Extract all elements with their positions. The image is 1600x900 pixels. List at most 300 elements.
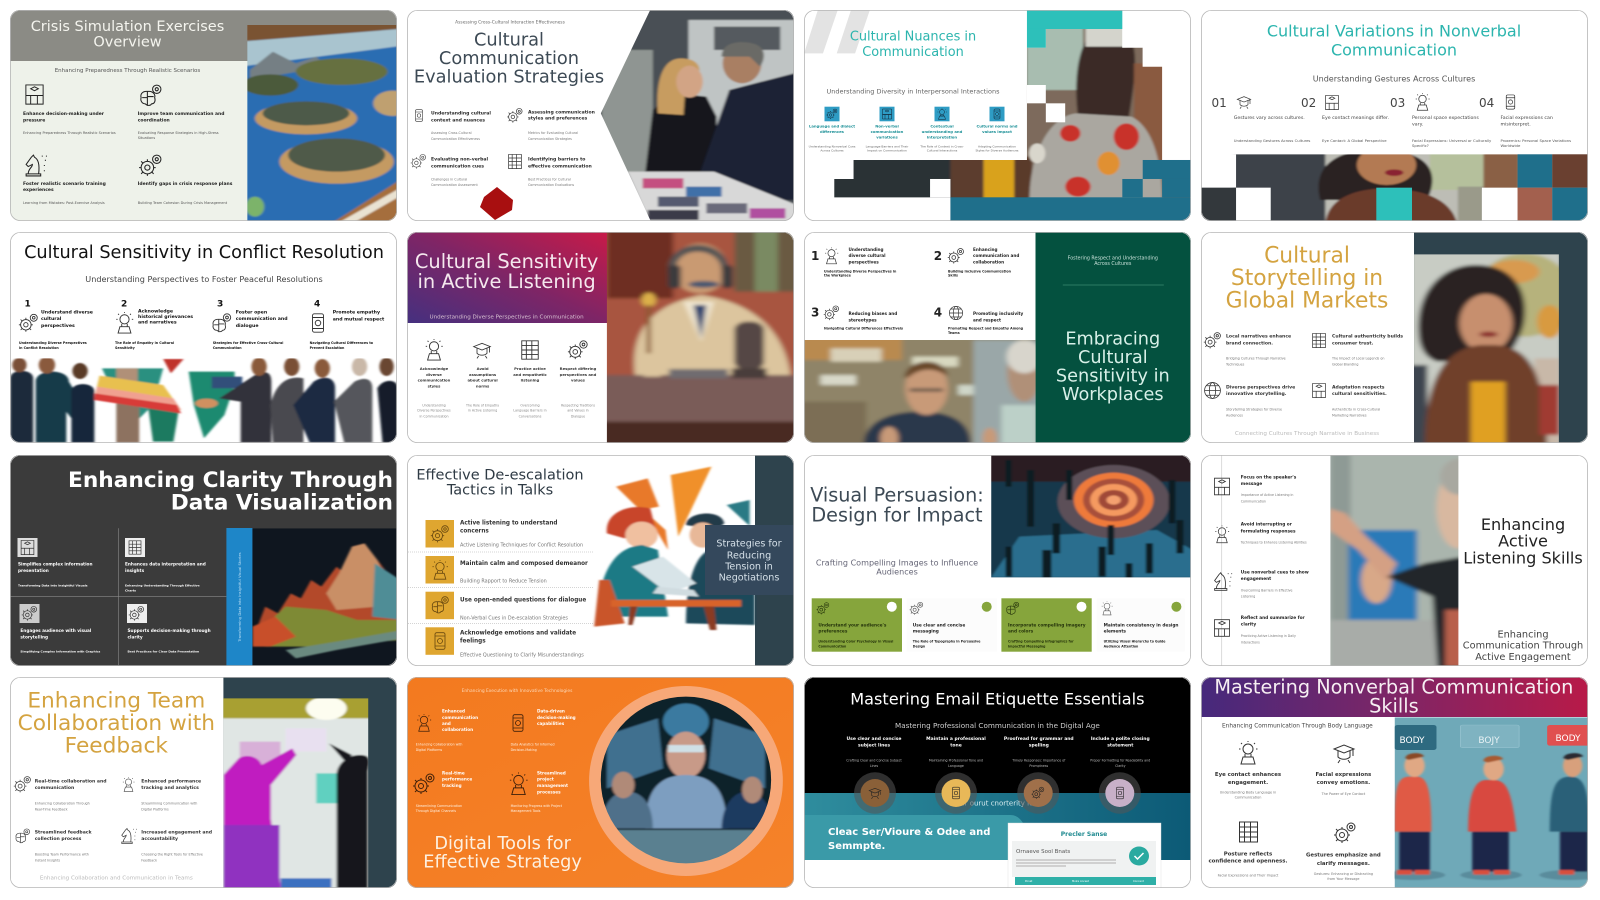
row 1	[426, 520, 583, 548]
item 2	[1313, 333, 1403, 367]
title: Communication	[1331, 40, 1457, 59]
item 3: Storytelling Strategies for Diverse	[1226, 407, 1282, 411]
item 3	[513, 341, 547, 418]
item 4: Gestures emphasize and	[1306, 853, 1381, 859]
item 1: Across Cultures	[820, 148, 844, 152]
item 4: Respecting Traditions	[561, 403, 595, 407]
item 03: 03	[1390, 96, 1405, 110]
title: Listening Skills	[1463, 548, 1583, 567]
item 3: performance	[442, 777, 472, 782]
item 4: Dialogue	[571, 414, 585, 418]
item 01	[1212, 96, 1310, 143]
item 2: Sensitivity	[115, 346, 136, 350]
item 3	[811, 306, 904, 331]
item 3: engagement	[1241, 576, 1271, 582]
item 2: Improve team communication and	[138, 111, 224, 117]
panel: Enhancing Clarity Through Data Visualization	[10, 455, 403, 668]
row 4: Effective Questioning to Clarify Misunderstandings	[460, 652, 584, 658]
item 3: communication cues	[431, 164, 484, 170]
item 3: Cultural Interactions	[927, 148, 958, 152]
item 1: 1	[24, 300, 31, 310]
item 03: Personal space expectations	[1412, 115, 1479, 121]
item 1: perspectives	[848, 260, 879, 265]
item 1: Techniques	[1225, 363, 1245, 367]
item 4: values impact	[982, 129, 1012, 134]
side subtitle: Across Cultures	[1094, 261, 1132, 267]
dark side panel	[1414, 232, 1588, 443]
item 2: Maintaining Professional Tone and	[929, 759, 983, 763]
panel: Cultural Sensitivity in Conflict Resolution	[10, 232, 398, 443]
white form card: Precler Sanse	[1061, 831, 1107, 838]
title: Cultural	[1264, 243, 1350, 268]
item 4: and mutual respect	[333, 316, 385, 322]
subtitle: Enhancing Preparedness Through Realistic Scenarios	[55, 68, 200, 74]
item 03: Facial Expressions: Universal or Culturally	[1412, 138, 1492, 143]
item 1: Lines	[870, 764, 878, 768]
teal band	[804, 793, 1191, 860]
item 3: Reducing biases and	[848, 311, 897, 316]
item 3: Communication Assessment	[431, 183, 479, 187]
item 4	[138, 155, 233, 205]
image: colleagues reviewing color swatches	[600, 10, 794, 221]
title: Enhancing Clarity Through	[68, 468, 393, 493]
item 3: Language Barriers in	[513, 409, 547, 413]
item 1: communication	[418, 378, 451, 383]
item 1: context and nuances	[431, 118, 485, 124]
item 1	[1214, 474, 1297, 503]
item 4: clarity	[128, 634, 143, 640]
title: Active	[1498, 532, 1548, 551]
item 4	[1090, 736, 1150, 814]
item 1: Enhancing Collaboration Through	[35, 802, 90, 806]
speech bubble labels: BODY	[1555, 734, 1581, 744]
item 4: management	[537, 783, 568, 788]
item 1	[809, 107, 856, 152]
subtitle: Communication Through	[1463, 640, 1583, 652]
item 4: perspectives and	[560, 372, 597, 377]
item 2: The Role of Empathy in Cultural	[115, 341, 174, 345]
item 3: interpretation	[927, 134, 957, 139]
row 1: Active Listening Techniques for Conflict Resolution	[460, 542, 583, 548]
callout: strategies for reducing tension	[705, 525, 795, 595]
item 4: from Your Message	[1327, 877, 1359, 881]
item 4: Identify gaps in crisis response plans	[138, 181, 233, 187]
image: silhouettes at a whiteboard	[219, 695, 372, 892]
image: woman in futuristic helmet at control table	[597, 695, 775, 867]
title: Cultural	[1078, 348, 1148, 368]
item 1: brand connection.	[1226, 340, 1273, 346]
item 1: Enhanced	[442, 709, 465, 714]
image: mosaic photo of woman in patterned shirt	[820, 7, 1198, 227]
item 3: Streamlining Communication	[416, 804, 462, 808]
item 4: and respect	[973, 318, 1001, 323]
item 1: Bridging Cultures Through Narrative	[1226, 357, 1286, 361]
card 2	[907, 598, 997, 652]
title: Collaboration with	[18, 711, 215, 736]
item 2: 2	[121, 300, 127, 310]
item 4: Cultural norms and	[976, 124, 1018, 129]
item 1	[18, 538, 92, 588]
red hexagon accent	[480, 187, 513, 220]
item 3: Learning from Mistakes: Post-Exercise Analysis	[23, 201, 105, 205]
item 1	[417, 339, 451, 418]
black header area	[804, 677, 1191, 793]
title: Evaluation Strategies	[414, 67, 604, 88]
light teal banner	[804, 815, 1027, 860]
item 2: and narratives	[138, 320, 177, 326]
item 04: Worldwide	[1500, 143, 1521, 148]
row 3: Non-Verbal Cues in De-escalation Strategies	[460, 615, 568, 621]
item 4: Management Tools	[511, 809, 541, 813]
item 1: in Conflict Resolution	[19, 346, 59, 350]
card 2: messaging	[913, 629, 939, 635]
card 1: Communication	[818, 644, 847, 648]
item 4: processes	[537, 789, 561, 794]
item 02: Eye Contact: A Global Perspective	[1322, 138, 1387, 143]
title: Communication	[439, 48, 579, 69]
item 3: Listening	[1241, 594, 1255, 598]
item 3: experiences	[23, 187, 54, 193]
item 3	[16, 829, 93, 863]
item 1: in Communication	[419, 414, 449, 418]
dark side panel	[223, 677, 397, 888]
subtitle: Audiences	[876, 568, 918, 577]
item 2: Global Branding	[1332, 363, 1358, 367]
item 3: Diverse perspectives drive	[1226, 384, 1295, 390]
card 1: preferences	[818, 629, 848, 635]
item 2: Enhanced performance	[141, 778, 201, 784]
item 4: Gestures: Enhancing or Distracting	[1314, 872, 1373, 876]
item 1: Transforming Data into Insightful Visuals	[18, 584, 88, 588]
item 1: Enhancing Collaboration with	[416, 743, 462, 747]
item 2: Techniques to Enhance Listening Abilities	[1240, 540, 1307, 544]
title: Tactics in Talks	[446, 482, 553, 498]
item 2: Decision-Making	[511, 748, 537, 752]
item 3: Communication	[213, 346, 242, 350]
title: Cultural Nuances in	[850, 30, 976, 45]
item 3: Evaluating non-verbal	[431, 157, 488, 163]
item 3: Overcoming Barriers in Effective	[1241, 588, 1293, 592]
item 1: Acknowledge	[420, 366, 449, 371]
item 3	[1208, 822, 1288, 877]
item 1: and	[442, 721, 451, 726]
item 1: Local narratives enhance	[1226, 334, 1291, 340]
title: Data Visualization	[171, 490, 393, 516]
card 4: Maintain consistency in design	[1104, 623, 1178, 629]
item 1: Communication Effectiveness	[431, 137, 480, 141]
item 1: styles	[428, 383, 441, 388]
item 1: communication	[35, 785, 74, 791]
item 3: spelling	[1029, 743, 1049, 749]
item 3: listening	[521, 378, 540, 383]
item 2	[138, 85, 224, 140]
item 1	[416, 110, 491, 141]
panel: Cultural Nuances in Communication	[804, 7, 1198, 227]
row 3	[426, 592, 586, 621]
card 4: Audience Attention	[1104, 644, 1139, 648]
card 1: Understand your audience's	[818, 623, 887, 629]
item 3: Promptness	[1029, 764, 1049, 768]
item 1: Communication	[1235, 795, 1261, 799]
item 04: Proxemics: Personal Space Variations	[1500, 138, 1571, 143]
item 3: Streamlined feedback	[35, 829, 93, 835]
row 1: Active listening to understand	[460, 520, 557, 526]
item 2	[115, 300, 193, 350]
subtitle: Understanding Perspectives to Foster Peaceful Resolutions	[85, 274, 323, 284]
item 1: diverse	[426, 372, 442, 377]
panel: Cultural Storytelling in Global Markets	[1201, 232, 1588, 445]
title: in Active Listening	[418, 270, 596, 293]
item 2: 2	[934, 249, 942, 263]
image: crowd around glowing target	[986, 452, 1198, 580]
item 1: engagement.	[1228, 780, 1268, 786]
item 04: 04	[1479, 96, 1494, 110]
item 3: 3	[217, 300, 223, 310]
item 1	[846, 736, 902, 814]
item 1: Assessing Cross-Cultural	[431, 131, 472, 135]
item 3: dialogue	[236, 323, 259, 329]
item 4: Clarity	[1115, 764, 1126, 768]
card 4	[1097, 598, 1185, 652]
panel: Visual Persuasion: Design for Impact	[804, 452, 1198, 666]
panel: Enhancing Active Listening Skills	[1201, 452, 1588, 668]
item 4: Styles for Diverse Audiences	[976, 148, 1019, 152]
title: Feedback	[65, 733, 168, 758]
item 4	[509, 154, 592, 187]
title: Workplaces	[1062, 385, 1164, 405]
item 4: Streamlined	[537, 770, 566, 775]
title: Storytelling in	[1231, 266, 1383, 291]
item 02	[1301, 95, 1389, 143]
item 3	[23, 155, 106, 205]
garbled band text: dr ourut cnorterity ie..	[960, 800, 1038, 808]
image: mosaic photo of smiling woman	[1201, 154, 1588, 221]
item 2: in Active Listening	[468, 409, 497, 413]
panel: Digital Tools for Effective Strategy	[407, 677, 794, 888]
item 2: communication and	[973, 253, 1019, 258]
item 4: Marketing Narratives	[1332, 414, 1367, 418]
panel: Crisis Simulation Exercises Overview	[10, 10, 412, 227]
subtitle: Crafting Compelling Images to Influence	[816, 558, 978, 567]
item 01: 01	[1212, 96, 1227, 110]
item 2: The Impact of Local Legends on	[1331, 357, 1384, 361]
item 3: Use nonverbal cues to show	[1241, 569, 1309, 575]
item 4: Promote empathy	[333, 309, 380, 315]
vertical strip text: Transforming Data into Insightful Visual Stories	[237, 552, 242, 643]
subtitle: Enhancing	[1497, 629, 1549, 640]
title: Mastering Email Etiquette Essentials	[850, 690, 1144, 708]
item 3: Foster open	[236, 309, 267, 315]
item 4	[1214, 615, 1306, 644]
timeline line	[1221, 455, 1223, 666]
item 4: Interactions	[1241, 640, 1260, 644]
item 3: understanding and	[922, 129, 963, 134]
item 4: Authenticity in Cross-Cultural	[1332, 407, 1380, 411]
item 2: styles and preferences	[528, 116, 587, 122]
item 1	[416, 709, 478, 752]
white form card: Ornaeve Sool Bnats	[1016, 849, 1070, 855]
banner headline: Cleac Ser/Vioure & Odee and	[828, 827, 990, 838]
title: Overview	[93, 34, 162, 50]
item 2: capabilities	[537, 721, 565, 726]
item 1: Understanding Body Language in	[1220, 791, 1276, 795]
row 2: Building Rapport to Reduce Tension	[460, 579, 547, 585]
title: Communication	[862, 45, 964, 60]
item 4	[976, 107, 1019, 152]
title: Design for Impact	[811, 504, 983, 527]
item 3: innovative storytelling.	[1226, 391, 1287, 397]
panel: Effective De-escalation Tactics in Talks	[407, 455, 795, 666]
item 2: Data-driven	[537, 709, 565, 714]
item 4	[934, 306, 1024, 335]
item 4: Best Practices for Clear Data Presentation	[128, 650, 199, 654]
item 1: Understanding	[848, 247, 884, 252]
item 4: Prevent Escalation	[310, 346, 345, 350]
item 2: historical grievances	[138, 314, 193, 320]
white form card: Ponet	[1025, 879, 1032, 883]
item 02: 02	[1301, 96, 1316, 110]
top label: Assessing Cross-Cultural Interaction Effectiveness	[455, 20, 566, 26]
subtitle: Enhancing Communication Through Body Language	[1222, 724, 1373, 730]
title: Mastering Nonverbal Communication	[1214, 675, 1573, 698]
title: Visual Persuasion:	[810, 484, 984, 507]
item 4: Feedback	[141, 859, 157, 863]
item 2: Digital Platforms	[141, 808, 169, 812]
panel: Mastering Nonverbal Communication Skills	[1201, 675, 1600, 889]
item 2: Cultural authenticity builds	[1332, 334, 1403, 340]
item 04	[1479, 95, 1571, 148]
item 4: Practicing Active Listening in Daily	[1241, 634, 1296, 638]
image: woman speaking before a globe	[1409, 252, 1573, 445]
callout: strategies for reducing tension: Negotiations	[719, 573, 779, 584]
title: Global Markets	[1226, 288, 1388, 313]
item 3: Engages audience with visual	[20, 628, 92, 634]
item 2: Data Analytics for Informed	[511, 743, 554, 747]
item 3	[213, 300, 288, 350]
item 4: values	[571, 378, 586, 383]
item 2: norms	[476, 383, 490, 388]
panel: Embracing Cultural Sensitivity in Workplaces	[800, 232, 1192, 450]
item 2: tone	[950, 743, 962, 749]
white form card: Concent	[1133, 879, 1144, 883]
footer line: Enhancing Collaboration and Communication in Teams	[40, 876, 193, 882]
item 2: collaboration	[973, 260, 1004, 265]
item 1: Digital Platforms	[416, 748, 442, 752]
image: two men in discussion	[800, 337, 1042, 450]
subtitle: Understanding Diversity in Interpersonal Interactions	[827, 87, 1000, 95]
item 4: Identifying barriers to	[528, 157, 585, 163]
blue vertical strip	[226, 528, 252, 668]
callout: strategies for reducing tension: Tension in	[724, 561, 773, 572]
item 1: message	[1241, 482, 1262, 487]
item 03: Specific?	[1412, 143, 1429, 148]
item 2: Enhancing Understanding Through Effective	[125, 584, 200, 588]
item 1: pressure	[23, 118, 45, 124]
callout: strategies for reducing tension: Reducing	[727, 550, 771, 561]
item 01: Understanding Gestures Across Cultures	[1234, 138, 1310, 143]
item 2: Streamlining Communication with	[141, 802, 197, 806]
item 3: Challenges in Cultural	[431, 177, 467, 181]
title: Cultural Variations in Nonverbal	[1267, 22, 1521, 41]
item 3: Through Digital Channels	[415, 809, 456, 813]
grid lines	[10, 528, 226, 665]
item 4: Best Practices for Cultural	[528, 177, 571, 181]
item 3: Boosting Team Performance with	[35, 852, 89, 856]
item 2	[125, 538, 206, 593]
item 1: Use clear and concise	[847, 736, 901, 742]
item 2: assumptions	[469, 372, 497, 377]
item 4: 4	[314, 300, 320, 310]
item 3: communication and	[236, 316, 288, 322]
title: Embracing	[1065, 329, 1160, 349]
item 2: Building Inclusive Communication	[948, 269, 1012, 273]
card 1: Understanding Color Psychology in Visual	[818, 640, 893, 644]
speech bubble labels	[1399, 734, 1581, 746]
card 2: The Role of Typography in Persuasive	[913, 640, 980, 644]
item 4: accountability	[141, 836, 178, 842]
item 2: Assessing communication	[528, 109, 595, 115]
illustration: three men with speech bubbles	[1384, 717, 1600, 889]
item 3: Facial Expressions and Their Impact	[1218, 873, 1279, 877]
item 3: Audiences	[1226, 414, 1243, 418]
item 2: The Role of Empathy	[465, 403, 499, 407]
item 1: Real-time collaboration and	[35, 778, 107, 784]
item 1	[1215, 741, 1281, 799]
item 2: Language Barriers and Their	[866, 144, 909, 148]
panel: Cultural Sensitivity in Active Listening	[407, 228, 801, 448]
item 4: Building Team Cohesion During Crisis Management	[138, 201, 228, 205]
item 2: Avoid	[477, 366, 489, 371]
item 2: Language	[948, 764, 964, 768]
divider	[1063, 284, 1164, 286]
item 4: effective communication	[528, 164, 592, 170]
card 3: Impactful Messaging	[1008, 644, 1046, 648]
item 3	[919, 107, 964, 152]
item 4: and Values in	[567, 409, 589, 413]
item 4	[310, 300, 385, 350]
item 2: coordination	[138, 118, 170, 124]
item 1	[1204, 333, 1291, 367]
item 2: Facial expressions	[1316, 772, 1371, 778]
item 1: perspectives	[41, 323, 75, 329]
item 4	[1313, 383, 1387, 418]
item 04: misinterpret.	[1500, 122, 1531, 128]
title: Effective Strategy	[423, 853, 582, 873]
title: Crisis Simulation Exercises	[31, 19, 224, 35]
subtitle: Understanding Diverse Perspectives in Communication	[430, 315, 584, 321]
item 4: Choosing the Right Tools for Effective	[141, 852, 203, 856]
card 3: and colors	[1008, 629, 1034, 635]
item 1: Real-Time Feedback	[35, 808, 68, 812]
item 1: Language and dialect	[809, 124, 855, 129]
item 2: Evaluating Response Strategies in High-Stress	[138, 131, 219, 135]
item 2: The Power of Eye Contact	[1321, 792, 1366, 796]
title: Cultural Sensitivity in Conflict Resolution	[24, 243, 384, 263]
item 1: Communication	[1241, 499, 1266, 503]
callout: strategies for reducing tension: Strategies for	[716, 539, 782, 550]
header band	[10, 10, 397, 61]
item 2: Avoid interrupting or	[1241, 522, 1293, 528]
item 2	[926, 736, 986, 814]
item 3: 3	[811, 306, 819, 320]
chart image: 3D data mountains	[252, 528, 403, 668]
item 3	[411, 154, 488, 187]
item 04: Facial expressions can	[1500, 115, 1553, 121]
item 2	[465, 343, 499, 413]
title: Skills	[1369, 694, 1419, 717]
item 3: Instant Insights	[35, 859, 60, 863]
item 3: tracking	[442, 783, 462, 788]
